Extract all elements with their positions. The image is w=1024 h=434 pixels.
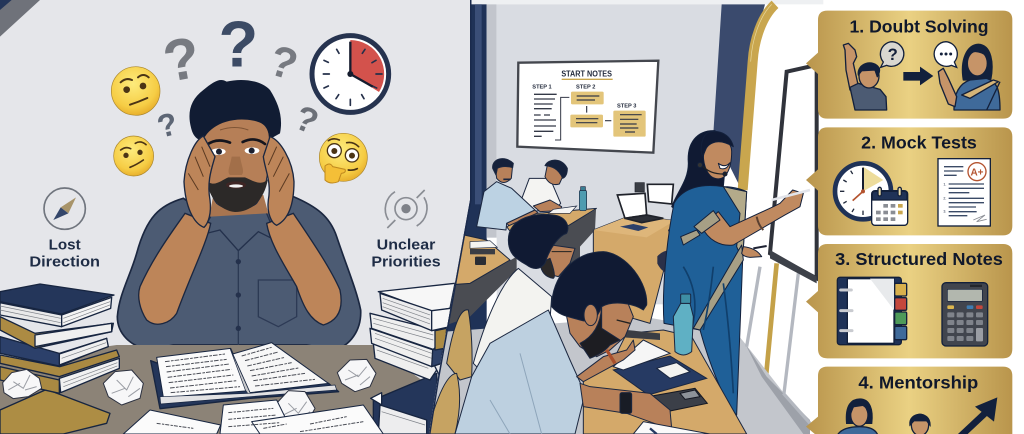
panel: struggling student	[0, 0, 480, 434]
icon: question bubble	[880, 42, 904, 67]
card: doubt solving	[806, 11, 1012, 119]
notebook	[613, 340, 707, 395]
neck	[209, 195, 268, 251]
start notes board: STEP 2	[576, 85, 595, 91]
book stack: left	[0, 284, 119, 434]
teacher	[663, 131, 803, 415]
icon: binder	[837, 277, 907, 345]
face	[563, 300, 633, 357]
window frame	[747, 267, 810, 423]
label: unclear priorities	[371, 237, 441, 271]
icon: graded test paper: 2.	[943, 196, 946, 200]
arrow: growth	[960, 412, 987, 434]
label: unclear priorities: Priorities	[371, 255, 441, 271]
icon: compass	[44, 188, 85, 229]
lower hand	[742, 247, 762, 257]
book stack: right	[370, 283, 455, 434]
start notes board: START NOTES	[561, 70, 613, 79]
question marks: ?	[218, 8, 258, 81]
question marks	[153, 8, 324, 145]
hair	[189, 80, 281, 140]
hands	[184, 136, 215, 227]
icon: question bubble: ?	[888, 45, 898, 64]
face	[703, 140, 732, 179]
card: mentorship: 4. Mentorship	[858, 372, 978, 392]
question marks: ?	[289, 98, 324, 142]
panel divider edge	[429, 0, 470, 434]
arrow	[903, 67, 933, 85]
back desks	[447, 208, 597, 325]
front student: white shirt	[473, 214, 575, 377]
floor	[423, 317, 810, 434]
shirt	[117, 197, 361, 350]
question marks: ?	[264, 37, 303, 90]
face	[203, 113, 269, 210]
emoji: thinking	[319, 133, 367, 183]
desk surface	[0, 345, 440, 434]
card: mock tests: 2. Mock Tests	[861, 132, 977, 152]
icon: graded test paper: 1.	[943, 182, 946, 186]
label: lost direction	[29, 237, 100, 271]
wall and pillar	[423, 0, 823, 4]
panel: classroom scene	[423, 0, 1024, 434]
start notes board	[517, 61, 658, 153]
desk items	[548, 206, 577, 213]
icon: calculator	[942, 283, 988, 346]
large whiteboard	[770, 65, 817, 278]
loose paper sheets	[123, 400, 383, 434]
open book	[151, 343, 339, 409]
arm	[577, 340, 635, 382]
start notes board: STEP 1	[532, 85, 552, 91]
card: structured notes	[806, 244, 1012, 358]
icon: graded test paper	[938, 159, 990, 226]
card: doubt solving: 1. Doubt Solving	[849, 16, 988, 36]
panel: solution cards	[806, 11, 1012, 434]
front student: blue shirt	[455, 252, 672, 434]
front desk	[583, 330, 747, 434]
emoji: confused	[111, 67, 160, 115]
card: mock tests	[806, 127, 1012, 235]
bottle: front	[673, 294, 693, 355]
crumpled paper balls	[3, 359, 376, 427]
icon: teacher	[938, 44, 1000, 110]
bottle: back	[579, 187, 587, 211]
icon: student raising hand	[843, 43, 887, 110]
label: unclear priorities: Unclear	[377, 237, 436, 253]
icon: calendar	[872, 187, 908, 225]
arm	[702, 190, 803, 245]
forearms	[139, 213, 211, 324]
chairs: near	[427, 310, 472, 434]
icon: graded test paper: 3.	[943, 210, 946, 214]
icon: mentor	[837, 399, 878, 434]
card: mentorship	[806, 367, 1012, 434]
label: lost direction: Lost	[49, 237, 81, 253]
icon: speech bubble	[934, 42, 957, 67]
center desk	[593, 215, 675, 323]
eyes and brows	[211, 148, 226, 155]
icon: target	[385, 190, 427, 228]
paper and pen	[633, 422, 710, 434]
back students	[477, 159, 567, 230]
start notes board: STEP 3	[617, 103, 636, 109]
gold door frame	[743, 4, 775, 190]
hair	[671, 130, 725, 208]
question marks: ?	[158, 25, 205, 95]
beard	[206, 177, 268, 212]
saree	[663, 186, 747, 415]
stressed man	[117, 80, 361, 350]
icon: clock	[835, 163, 891, 219]
calculator	[648, 388, 707, 412]
emoji: skeptical	[114, 136, 154, 176]
card: structured notes: 3. Structured Notes	[835, 249, 1003, 269]
icon: graded test paper: A+	[970, 167, 984, 178]
clock with red time sector	[312, 36, 389, 112]
laptop	[617, 183, 673, 223]
question marks: ?	[153, 105, 181, 145]
icon: mentee	[910, 414, 930, 434]
chair	[657, 229, 669, 272]
label: lost direction: Direction	[29, 255, 100, 271]
